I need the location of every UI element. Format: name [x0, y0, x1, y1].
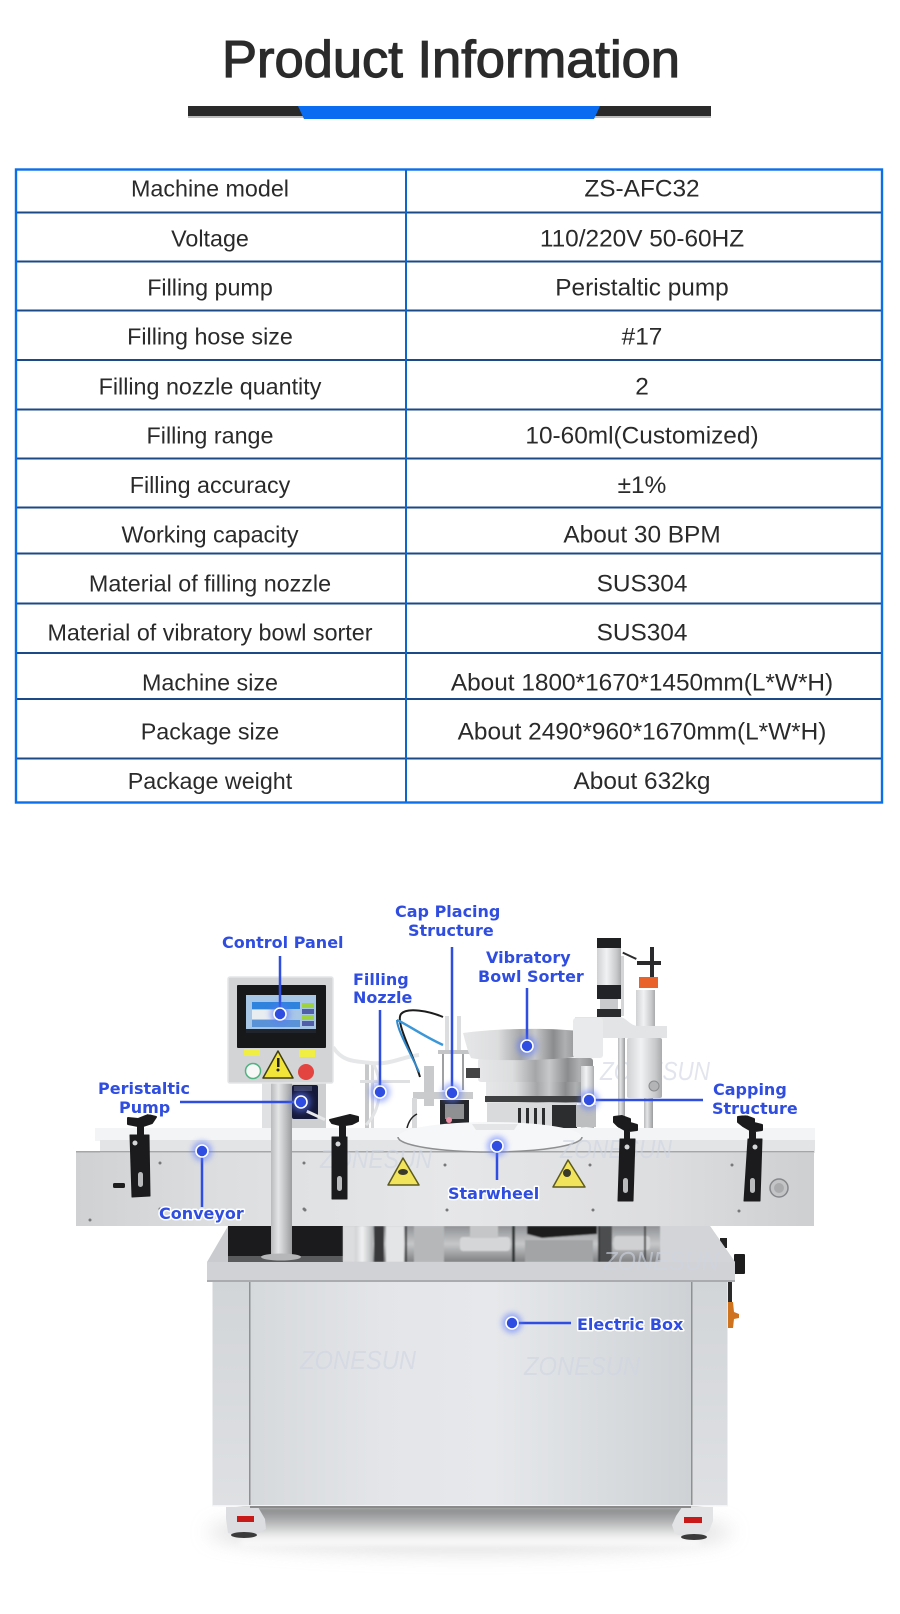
emergency stop button	[298, 1064, 314, 1080]
watermarks: ZONESUN	[523, 1351, 640, 1381]
row: voltage: 110/220V 50-60HZ	[540, 226, 744, 252]
row: machine size	[142, 670, 833, 696]
pole base flange	[261, 1254, 301, 1260]
specification table	[16, 169, 882, 802]
clamp 4	[738, 1116, 762, 1201]
row: filling accuracy: ±1%	[618, 472, 666, 499]
row: voltage: Voltage	[171, 226, 249, 252]
callout: conveyor	[159, 1141, 244, 1223]
clamp 3	[614, 1116, 637, 1201]
round indicator	[770, 1179, 788, 1197]
clamp 2	[330, 1115, 358, 1199]
base table top	[207, 1226, 735, 1282]
warning triangle right	[553, 1160, 585, 1187]
row: material of filling nozzle: SUS304	[597, 570, 687, 598]
row: package size: Package size	[141, 718, 279, 744]
row: filling range: 10-60ml(Customized)	[525, 422, 759, 450]
row: material of filling nozzle: Material of filling nozzle	[89, 570, 331, 596]
row: filling hose size: Filling hose size	[127, 324, 293, 350]
row: package weight: Package weight	[128, 768, 293, 794]
callout: starwheel	[448, 1136, 539, 1203]
warning triangle left	[388, 1158, 419, 1185]
table grid	[16, 169, 882, 802]
conveyor watermarks: ZONESUN	[319, 1144, 432, 1174]
peristaltic pump	[292, 1085, 326, 1121]
callout: peristaltic pump	[98, 1079, 311, 1117]
control panel	[228, 977, 333, 1083]
vibratory bowl sorter	[463, 1029, 593, 1128]
row: material of vibratory bowl sorter	[48, 620, 687, 646]
handwheel	[622, 947, 661, 977]
watermarks: ZONESUN	[599, 1056, 710, 1086]
callout: filling nozzle	[353, 970, 412, 1102]
rear side attachments	[720, 1238, 745, 1328]
callout: electric box: Electric Box	[577, 1315, 684, 1334]
pump backing	[262, 1083, 326, 1129]
row: filling pump: Filling pump	[147, 274, 273, 300]
yellow labels	[244, 1049, 315, 1057]
callout: peristaltic pump: Peristaltic	[98, 1079, 190, 1098]
touch screen	[237, 985, 326, 1048]
warning triangle	[263, 1051, 293, 1078]
capping head	[581, 1066, 594, 1128]
callout: peristaltic pump: Pump	[119, 1098, 170, 1117]
row: filling hose size: #17	[622, 324, 662, 350]
panel screws	[88, 1162, 740, 1222]
row: working capacity	[122, 522, 721, 548]
title: Product Information	[222, 31, 680, 89]
row: machine model: ZS-AFC32	[584, 176, 700, 202]
callout: vibratory bowl sorter: Bowl Sorter	[478, 967, 584, 986]
row: filling accuracy	[130, 472, 666, 499]
dark recess behind pole	[228, 1226, 343, 1262]
callout: electric box	[502, 1313, 684, 1334]
motor	[597, 938, 621, 1017]
row: package weight	[128, 768, 710, 795]
floor shadow	[208, 1506, 732, 1552]
filling nozzle assembly	[333, 1047, 419, 1128]
starwheel	[398, 1122, 582, 1152]
row: filling hose size	[127, 324, 662, 350]
watermarks: ZONESUN	[602, 1246, 719, 1276]
callout: cap placing structure: Structure	[408, 921, 494, 940]
row: filling nozzle quantity: Filling nozzle quantity	[99, 374, 322, 400]
row: filling nozzle quantity	[99, 374, 649, 400]
support arm	[573, 1017, 667, 1038]
row: machine size: About 1800*1670*1450mm(L*W*H)	[451, 670, 833, 696]
conveyor	[76, 1115, 815, 1226]
electric box cabinet	[212, 1282, 728, 1508]
small latch	[113, 1183, 125, 1188]
row: package weight: About 632kg	[574, 768, 710, 795]
callout: capping structure: Capping	[713, 1080, 787, 1099]
callout: control panel	[222, 933, 344, 1024]
row: package size	[141, 718, 826, 746]
casters	[226, 1507, 713, 1540]
machine illustration	[76, 902, 815, 1552]
callout: cap placing structure: Cap Placing	[395, 902, 500, 921]
row: filling nozzle quantity: 2	[635, 374, 649, 400]
start button	[246, 1064, 260, 1078]
under-conveyor mechanism	[343, 1226, 660, 1262]
callout: control panel: Control Panel	[222, 933, 344, 952]
row: material of vibratory bowl sorter: SUS304	[597, 620, 687, 646]
callout: filling nozzle: Filling	[353, 970, 409, 989]
conveyor watermarks	[319, 1134, 672, 1174]
row: package size: About 2490*960*1670mm(L*W*H)	[458, 718, 826, 746]
row: filling range	[147, 422, 759, 450]
capping cylinder	[627, 1038, 662, 1098]
capping structure	[573, 938, 667, 1128]
row: machine model	[131, 176, 700, 202]
upper cylinder	[636, 990, 655, 1030]
conveyor watermarks: ZONESUN	[559, 1134, 672, 1164]
row: filling accuracy: Filling accuracy	[130, 472, 291, 498]
table front lip	[207, 1262, 735, 1281]
row: material of vibratory bowl sorter: Material of vibratory bowl sorter	[48, 620, 373, 646]
callout: vibratory bowl sorter	[478, 948, 584, 1056]
row: filling pump	[147, 274, 729, 302]
callout: starwheel: Starwheel	[448, 1184, 539, 1203]
title underline bar	[188, 106, 711, 119]
callout: conveyor: Conveyor	[159, 1204, 244, 1223]
callout: capping structure: Structure	[712, 1099, 798, 1118]
conveyor top rail	[76, 1128, 815, 1153]
watermarks: ZONESUN	[299, 1345, 416, 1375]
row: machine size: Machine size	[142, 670, 278, 696]
cap placing structure	[397, 1010, 473, 1128]
conveyor front panel	[76, 1152, 814, 1226]
callout: capping structure	[579, 1080, 798, 1118]
row: voltage	[171, 226, 744, 252]
row: material of filling nozzle	[89, 570, 687, 598]
row: filling pump: Peristaltic pump	[555, 274, 729, 302]
clamp 1	[128, 1115, 156, 1197]
orange collar	[639, 977, 658, 988]
support pole	[271, 1083, 292, 1258]
row: machine model: Machine model	[131, 176, 289, 202]
watermarks	[299, 1056, 719, 1381]
callout: vibratory bowl sorter: Vibratory	[486, 948, 571, 967]
callout: filling nozzle: Nozzle	[353, 988, 412, 1007]
callout: cap placing structure	[395, 902, 500, 1103]
columns	[618, 1038, 625, 1128]
row: filling range: Filling range	[147, 422, 273, 448]
row: working capacity: About 30 BPM	[563, 522, 721, 548]
row: working capacity: Working capacity	[122, 522, 299, 548]
